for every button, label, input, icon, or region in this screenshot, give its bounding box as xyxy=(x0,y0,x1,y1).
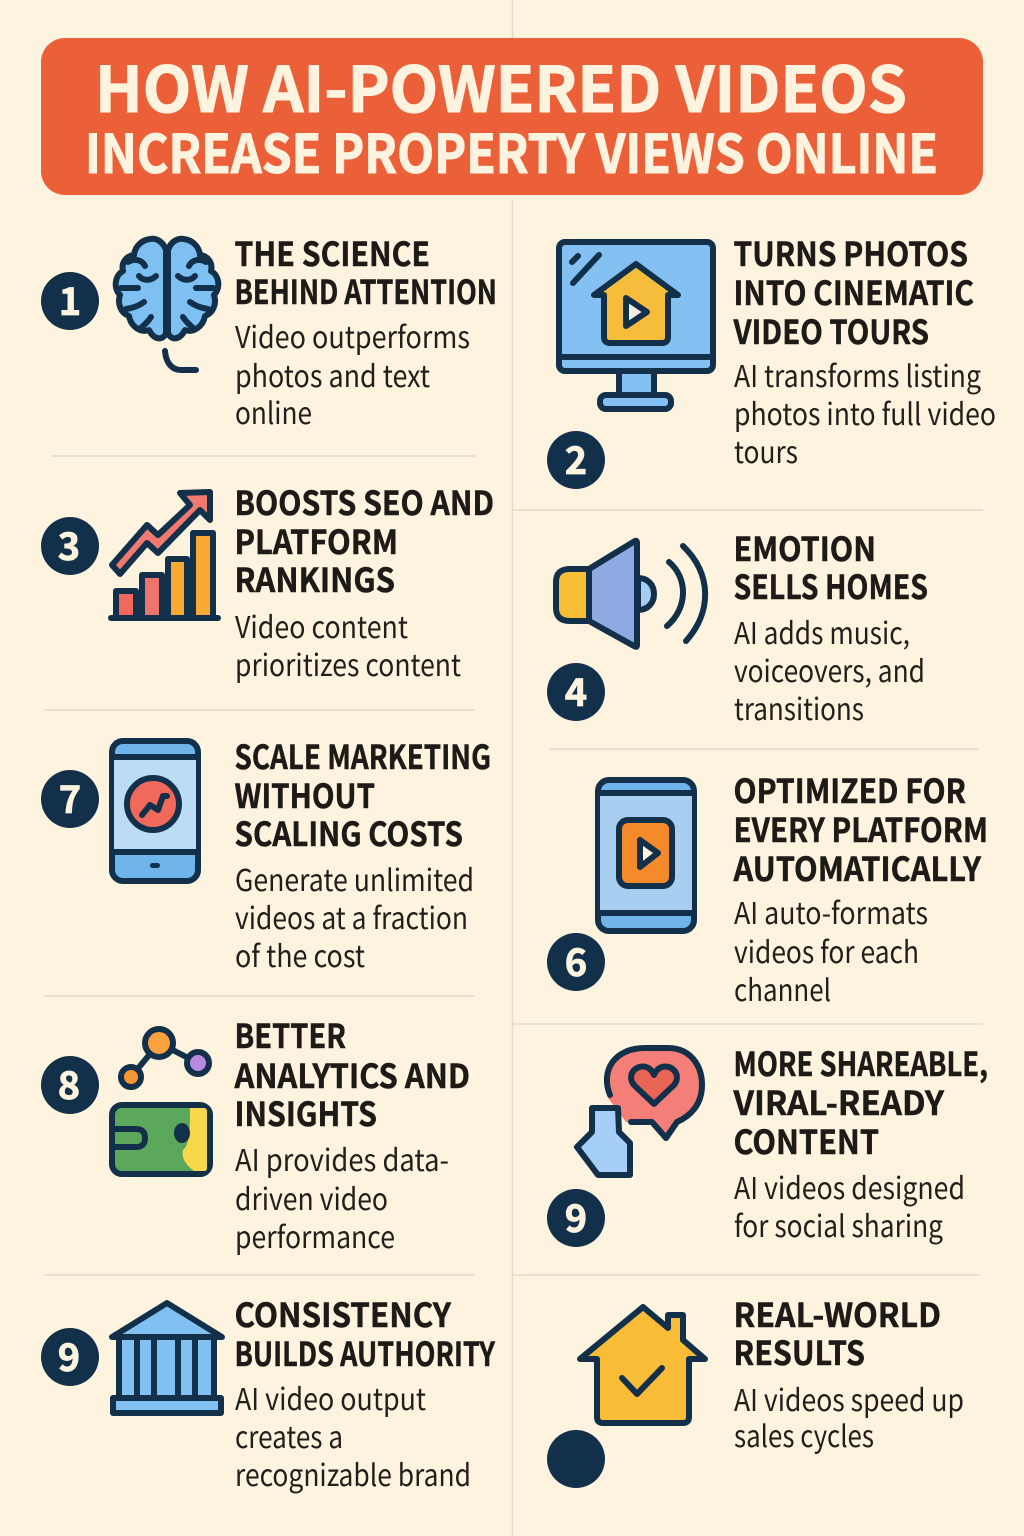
description: Video content xyxy=(235,603,408,647)
description: photos and text xyxy=(235,352,430,396)
icon: columned bank building xyxy=(112,1303,222,1413)
heading: RESULTS xyxy=(734,1327,865,1375)
panel: scale marketing without scaling costs xyxy=(41,731,491,976)
description xyxy=(734,352,996,472)
description: driven video xyxy=(235,1175,388,1219)
description: sales cycles xyxy=(734,1412,874,1456)
heading: SCALING COSTS xyxy=(234,808,463,856)
description: creates a xyxy=(235,1413,343,1457)
description: channel xyxy=(734,966,831,1010)
number badge 6 xyxy=(547,932,605,991)
panel: boosts seo and platform rankings xyxy=(41,477,494,685)
heading xyxy=(733,228,974,354)
number badge 4: 4 xyxy=(565,662,587,717)
description xyxy=(734,1376,964,1456)
panel: the science behind attention xyxy=(41,228,497,433)
heading xyxy=(234,1289,496,1376)
heading: INTO CINEMATIC xyxy=(734,267,974,315)
heading: WITHOUT xyxy=(234,770,375,818)
heading: THE SCIENCE xyxy=(234,228,430,276)
title line 1: HOW AI-POWERED VIDEOS xyxy=(95,40,907,131)
description: AI auto-formats xyxy=(734,889,928,933)
number badge 8 xyxy=(41,1055,99,1114)
panel: more shareable, viral-ready content xyxy=(547,1038,988,1247)
heading: BEHIND ATTENTION xyxy=(234,266,497,314)
panel: optimized for every platform automatically xyxy=(547,765,988,1010)
description: online xyxy=(235,389,312,433)
title line 2: INCREASE PROPERTY VIEWS ONLINE xyxy=(85,113,938,189)
description: AI adds music, xyxy=(734,609,910,653)
heading: BUILDS AUTHORITY xyxy=(234,1328,496,1376)
description: prioritizes content xyxy=(235,641,461,685)
number badge 3: 3 xyxy=(58,516,80,571)
description: recognizable brand xyxy=(235,1451,471,1495)
icon: wallet xyxy=(112,1105,210,1174)
number badge 7 xyxy=(41,769,99,828)
icon: monitor with house and play button xyxy=(559,242,713,409)
number badge 2 xyxy=(547,430,605,489)
title banner xyxy=(41,38,983,195)
number badge 9: 9 xyxy=(58,1327,80,1382)
description: Generate unlimited xyxy=(235,856,474,900)
icon: house with check mark xyxy=(580,1307,705,1423)
description xyxy=(235,603,461,685)
panel: emotion sells homes xyxy=(547,523,928,729)
description: tours xyxy=(734,428,798,472)
number badge 2: 2 xyxy=(565,430,587,485)
number badge 1 xyxy=(41,271,99,330)
panel: real-world results xyxy=(547,1289,964,1488)
icon: speech bubble with heart and hand xyxy=(577,1048,702,1175)
icon: data network nodes xyxy=(121,1029,209,1087)
description: AI video output xyxy=(235,1375,426,1419)
heading: SCALE MARKETING xyxy=(234,731,491,779)
heading xyxy=(234,477,494,602)
number badge 7: 7 xyxy=(59,769,81,824)
heading: INSIGHTS xyxy=(234,1088,377,1136)
heading: ANALYTICS AND xyxy=(234,1050,470,1098)
heading xyxy=(732,1038,988,1164)
description: Video outperforms xyxy=(235,313,470,357)
heading xyxy=(234,731,491,856)
heading: PLATFORM xyxy=(234,516,398,564)
number badge 9: 9 xyxy=(565,1188,587,1243)
description: AI videos speed up xyxy=(734,1376,964,1420)
number badge 4 xyxy=(547,662,605,721)
description: of the cost xyxy=(235,932,365,976)
heading xyxy=(234,228,497,314)
number badge 9 xyxy=(41,1327,99,1386)
description: AI provides data- xyxy=(235,1136,449,1180)
heading: VIRAL-READY xyxy=(732,1077,945,1125)
number badge 9 xyxy=(547,1188,605,1247)
description: voiceovers, and xyxy=(734,647,925,691)
description: videos at a fraction xyxy=(235,894,468,938)
heading: SELLS HOMES xyxy=(734,561,928,609)
heading: BETTER xyxy=(234,1010,346,1058)
heading: TURNS PHOTOS xyxy=(734,228,968,276)
icon: brain xyxy=(116,239,218,370)
panel: turns photos into cinematic video tours xyxy=(547,228,996,489)
icon: speaker with sound waves xyxy=(556,541,705,647)
description xyxy=(734,889,928,1010)
heading xyxy=(234,1010,470,1136)
description xyxy=(235,856,474,976)
description: for social sharing xyxy=(734,1202,943,1246)
heading: CONTENT xyxy=(734,1116,879,1164)
heading: BOOSTS SEO AND xyxy=(234,477,494,525)
panel: consistency builds authority xyxy=(41,1289,496,1495)
description: photos into full video xyxy=(734,390,996,434)
number badge 3 xyxy=(41,516,99,575)
description: videos for each xyxy=(734,928,919,972)
heading: VIDEO TOURS xyxy=(733,306,929,354)
description xyxy=(235,1375,471,1495)
heading xyxy=(734,1289,941,1375)
number badge 6: 6 xyxy=(565,932,587,987)
icon: smartphone with trend xyxy=(112,741,198,881)
description: transitions xyxy=(734,685,864,729)
number badge 1: 1 xyxy=(59,271,81,326)
heading xyxy=(733,765,988,891)
number badge 8: 8 xyxy=(58,1055,80,1110)
heading: EMOTION xyxy=(734,523,876,571)
heading: RANKINGS xyxy=(234,554,395,602)
description xyxy=(235,1136,449,1257)
blank number badge xyxy=(547,1430,605,1488)
description xyxy=(734,1164,965,1246)
heading: OPTIMIZED FOR xyxy=(734,765,966,813)
panel: better analytics and insights xyxy=(41,1010,470,1257)
description: performance xyxy=(235,1213,395,1257)
icon: phone with video play button xyxy=(598,780,694,931)
heading: CONSISTENCY xyxy=(234,1289,452,1337)
description xyxy=(734,609,925,729)
heading: REAL-WORLD xyxy=(734,1289,941,1337)
description xyxy=(235,313,470,433)
description: AI transforms listing xyxy=(734,352,981,396)
description: AI videos designed xyxy=(734,1164,965,1208)
heading xyxy=(734,523,928,609)
heading: AUTOMATICALLY xyxy=(733,843,982,891)
icon: rising bar chart with arrow xyxy=(111,492,218,618)
heading: EVERY PLATFORM xyxy=(734,804,988,852)
